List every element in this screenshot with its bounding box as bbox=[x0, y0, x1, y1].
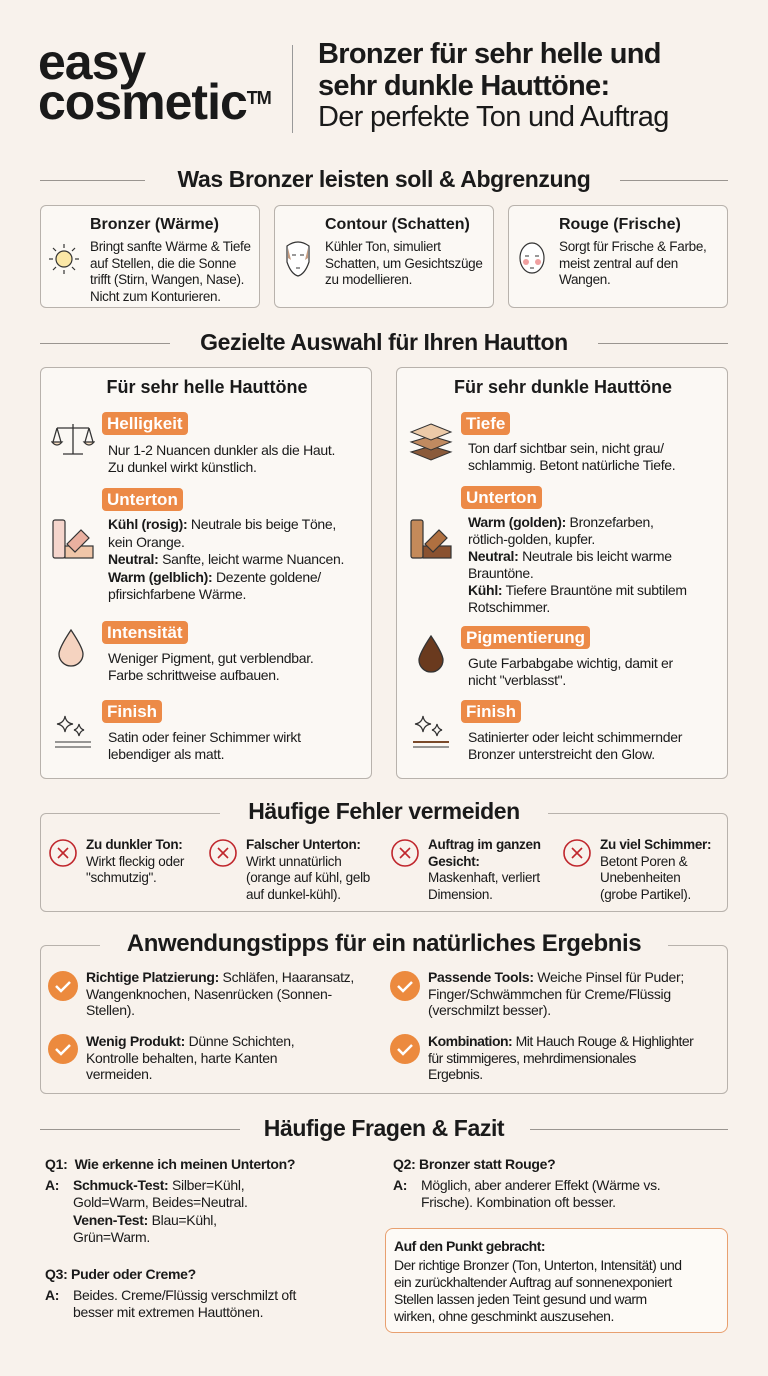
icon: swatches light bbox=[52, 519, 94, 559]
logo: easy bbox=[38, 34, 145, 90]
faq Q2: Möglich, aber anderer Effekt (Wärme vs. bbox=[421, 1176, 660, 1192]
panel: Anwendungstipps: Wangenknochen, Nasenrücken (Sonnen- bbox=[86, 986, 332, 1002]
tag: Unterton: Unterton bbox=[107, 490, 178, 509]
panel: Anwendungstipps: Ergebnis. bbox=[428, 1066, 483, 1082]
icon: scale bbox=[51, 424, 95, 455]
panel: helle Hauttöne: Weniger Pigment, gut verblendbar. bbox=[108, 650, 313, 666]
title: Bronzer für sehr helle und bbox=[318, 38, 661, 70]
panel: Fehler: Falscher Unterton: bbox=[246, 837, 361, 852]
panel: dunkle Hauttöne: Warm (golden): Bronzefarben, bbox=[468, 514, 654, 530]
panel: Fehler: Wirkt fleckig oder bbox=[86, 854, 184, 868]
callout: Auf den Punkt gebracht: Stellen lassen jeden Teint gesund und warm bbox=[394, 1291, 647, 1307]
panel: dunkle Hauttöne: Kühl: Tiefere Brauntöne mit subtilem bbox=[468, 582, 687, 598]
logo bbox=[38, 34, 271, 130]
callout: Auf den Punkt gebracht bbox=[385, 1228, 728, 1333]
panel: dunkle Hauttöne: Gute Farbabgabe wichtig, damit er bbox=[468, 655, 673, 671]
icon: face contour bbox=[286, 241, 310, 277]
faq Q3: besser mit extremen Hauttönen. bbox=[73, 1304, 263, 1320]
faq Q1: Schmuck-Test: Silber=Kühl, bbox=[73, 1176, 244, 1192]
panel: dunkle Hauttöne: Neutral: Neutrale bis leicht warme bbox=[468, 548, 672, 564]
faq Q2: Q2: Bronzer statt Rouge? bbox=[393, 1156, 555, 1172]
heading: Häufige Fragen: Häufige Fragen & Fazit bbox=[264, 1115, 504, 1141]
panel: dunkle Hauttöne bbox=[396, 367, 728, 779]
panel: dunkle Hauttöne: Ton darf sichtbar sein, nicht grau/ bbox=[468, 440, 664, 456]
title: Der perfekte Ton und Auftrag bbox=[318, 101, 669, 133]
tag: Finish bbox=[461, 700, 521, 723]
tag: Finish: Finish bbox=[107, 702, 157, 721]
panel: Anwendungstipps: (verschmilzt besser). bbox=[428, 1002, 551, 1018]
panel: helle Hauttöne: Zu dunkel wirkt künstlich. bbox=[108, 458, 257, 474]
card: Rouge: Sorgt für Frische & Farbe, meist zentral auf den Wangen. bbox=[559, 239, 707, 287]
panel: Fehler bbox=[40, 813, 728, 912]
icon: swatches dark bbox=[410, 519, 452, 559]
card: Rouge bbox=[508, 205, 728, 308]
panel: Fehler: Dimension. bbox=[428, 886, 493, 902]
icon: layers bbox=[410, 424, 452, 460]
faq Q1 bbox=[45, 1156, 295, 1245]
heading: Anwendungstipps: Anwendungstipps für ein natürliches Ergebnis bbox=[127, 930, 641, 957]
panel: Anwendungstipps: Richtige Platzierung: Schläfen, Haaransatz, bbox=[86, 969, 354, 985]
panel: Anwendungstipps: vermeiden. bbox=[86, 1066, 152, 1082]
panel: Anwendungstipps: Wenig Produkt: Dünne Schichten, bbox=[86, 1033, 294, 1049]
faq Q2 bbox=[393, 1156, 660, 1210]
tag: Tiefe bbox=[461, 412, 510, 435]
heading: Häufige Fehler: Häufige Fehler vermeiden bbox=[248, 798, 520, 824]
faq Q1: Gold=Warm, Beides=Neutral. bbox=[73, 1194, 248, 1210]
panel: dunkle Hauttöne: Für sehr dunkle Hauttöne bbox=[454, 377, 672, 397]
panel: helle Hauttöne: Neutral: Sanfte, leicht warme Nuancen. bbox=[108, 551, 344, 567]
title bbox=[318, 38, 669, 133]
faq Q3: Beides. Creme/Flüssig verschmilzt oft bbox=[73, 1286, 296, 1302]
card: Contour: Kühler Ton, simuliert Schatten, um Gesichtszüge zu modellieren. bbox=[325, 239, 483, 287]
tag: Unterton: Unterton bbox=[466, 488, 537, 507]
icon: drop light bbox=[58, 629, 84, 667]
panel: Anwendungstipps bbox=[40, 945, 728, 1094]
panel: Anwendungstipps: Finger/Schwämmchen für Creme/Flüssig bbox=[428, 986, 671, 1002]
tag: Tiefe: Tiefe bbox=[466, 414, 505, 433]
panel: Fehler: Gesicht: bbox=[428, 854, 480, 868]
logo: cosmeticTM bbox=[38, 74, 271, 130]
panel: Fehler: "schmutzig". bbox=[86, 870, 157, 885]
panel: Anwendungstipps: Passende Tools: Weiche Pinsel für Puder; bbox=[428, 969, 684, 985]
panel: helle Hauttöne: kein Orange. bbox=[108, 534, 185, 550]
panel: dunkle Hauttöne: rötlich-golden, kupfer. bbox=[468, 531, 595, 547]
panel: helle Hauttöne: Warm (gelblich): Dezente goldene/ bbox=[108, 568, 321, 584]
faq Q1: A: bbox=[45, 1176, 59, 1192]
card: Contour: Contour (Schatten) bbox=[325, 216, 470, 233]
panel: dunkle Hauttöne: schlammig. Betont natürliche Tiefe. bbox=[468, 456, 675, 472]
panel: Fehler: Wirkt unnatürlich bbox=[246, 854, 341, 868]
callout: Auf den Punkt gebracht: ein zurückhaltender Auftrag auf sonnenexponiert bbox=[394, 1274, 672, 1290]
panel: Anwendungstipps: Kontrolle behalten, harte Kanten bbox=[86, 1050, 277, 1066]
panel: Fehler: Zu viel Schimmer: bbox=[600, 837, 711, 852]
icon: face blush bbox=[519, 242, 545, 274]
panel: Fehler: Betont Poren & bbox=[600, 854, 687, 868]
icon: drop dark bbox=[418, 635, 444, 673]
icon: sparkle bbox=[55, 716, 91, 748]
panel: helle Hauttöne: Nur 1-2 Nuancen dunkler als die Haut. bbox=[108, 442, 335, 458]
icon: sun bbox=[49, 244, 79, 274]
panel: Anwendungstipps: Stellen). bbox=[86, 1002, 135, 1018]
panel: dunkle Hauttöne: Rotschimmer. bbox=[468, 599, 550, 615]
panel: Fehler: Maskenhaft, verliert bbox=[428, 870, 540, 885]
icons: error x bbox=[49, 839, 591, 867]
card: Bronzer bbox=[40, 205, 260, 308]
faq Q3: A: bbox=[45, 1286, 59, 1302]
tag: Intensität: Intensität bbox=[107, 623, 183, 642]
card: Contour bbox=[274, 205, 494, 308]
callout: Auf den Punkt gebracht: Auf den Punkt gebracht: bbox=[394, 1238, 545, 1254]
panel: Anwendungstipps: für stimmigeres, mehrdimensionales bbox=[428, 1050, 636, 1066]
panel: dunkle Hauttöne: Satinierter oder leicht schimmernder bbox=[468, 729, 682, 745]
panel: helle Hauttöne: Für sehr helle Hauttöne bbox=[106, 377, 308, 397]
panel: helle Hauttöne: lebendiger als matt. bbox=[108, 746, 224, 762]
faq Q1: Venen-Test: Blau=Kühl, bbox=[73, 1212, 217, 1228]
tag: Finish bbox=[102, 700, 162, 723]
panel: helle Hauttöne: Kühl (rosig): Neutrale bis beige Töne, bbox=[108, 516, 336, 532]
card: Bronzer: Bronzer (Wärme) bbox=[90, 216, 219, 233]
panel: dunkle Hauttöne: nicht "verblasst". bbox=[468, 672, 566, 688]
panel: helle Hauttöne: pfirsichfarbene Wärme. bbox=[108, 586, 246, 602]
panel: helle Hauttöne bbox=[40, 367, 372, 779]
panel: helle Hauttöne: Farbe schrittweise aufbauen. bbox=[108, 666, 279, 682]
panel: helle Hauttöne: Satin oder feiner Schimmer wirkt bbox=[108, 729, 301, 745]
tag: Finish: Finish bbox=[466, 702, 516, 721]
panel: dunkle Hauttöne: Brauntöne. bbox=[468, 565, 534, 581]
heading: Gezielte Auswahl: Gezielte Auswahl für Ihren Hautton bbox=[200, 329, 568, 355]
panel: Fehler: auf dunkel-kühl). bbox=[246, 886, 341, 902]
callout: Auf den Punkt gebracht: wirken, ohne geschminkt auszusehen. bbox=[394, 1308, 614, 1324]
panel: Fehler: (grobe Partikel). bbox=[600, 886, 691, 902]
icon: sparkle dark bbox=[413, 716, 449, 748]
faq Q1: Grün=Warm. bbox=[73, 1229, 150, 1245]
tag: Pigmentierung: Pigmentierung bbox=[466, 628, 585, 647]
panel: dunkle Hauttöne: Bronzer unterstreicht den Glow. bbox=[468, 746, 655, 762]
card: Bronzer: Bringt sanfte Wärme & Tiefe auf Stellen, die die Sonne trifft (Stirn, Wangen, Nase). Nicht zum Konturieren. bbox=[90, 239, 251, 304]
faq Q2: A: bbox=[393, 1176, 407, 1192]
tag: Helligkeit: Helligkeit bbox=[107, 414, 183, 433]
faq Q3: Q3: Puder oder Creme? bbox=[45, 1266, 196, 1282]
panel: Anwendungstipps: Kombination: Mit Hauch Rouge & Highlighter bbox=[428, 1033, 693, 1049]
card: Rouge: Rouge (Frische) bbox=[559, 216, 681, 233]
panel: Fehler: Zu dunkler Ton: bbox=[86, 837, 182, 852]
icons: check bbox=[48, 971, 420, 1064]
title: sehr dunkle Hauttöne: bbox=[318, 70, 609, 102]
panel: Fehler: (orange auf kühl, gelb bbox=[246, 870, 370, 885]
callout: Auf den Punkt gebracht: Der richtige Bronzer (Ton, Unterton, Intensität) und bbox=[394, 1257, 682, 1273]
faq Q2: Frische). Kombination oft besser. bbox=[421, 1194, 616, 1210]
heading: Was Bronzer leisten soll: Was Bronzer leisten soll & Abgrenzung bbox=[178, 166, 590, 192]
faq Q1: Q1: Wie erkenne ich meinen Unterton? bbox=[45, 1156, 295, 1172]
panel: Fehler: Unebenheiten bbox=[600, 870, 680, 885]
panel: Fehler: Auftrag im ganzen bbox=[428, 837, 541, 852]
faq Q3 bbox=[45, 1266, 296, 1320]
